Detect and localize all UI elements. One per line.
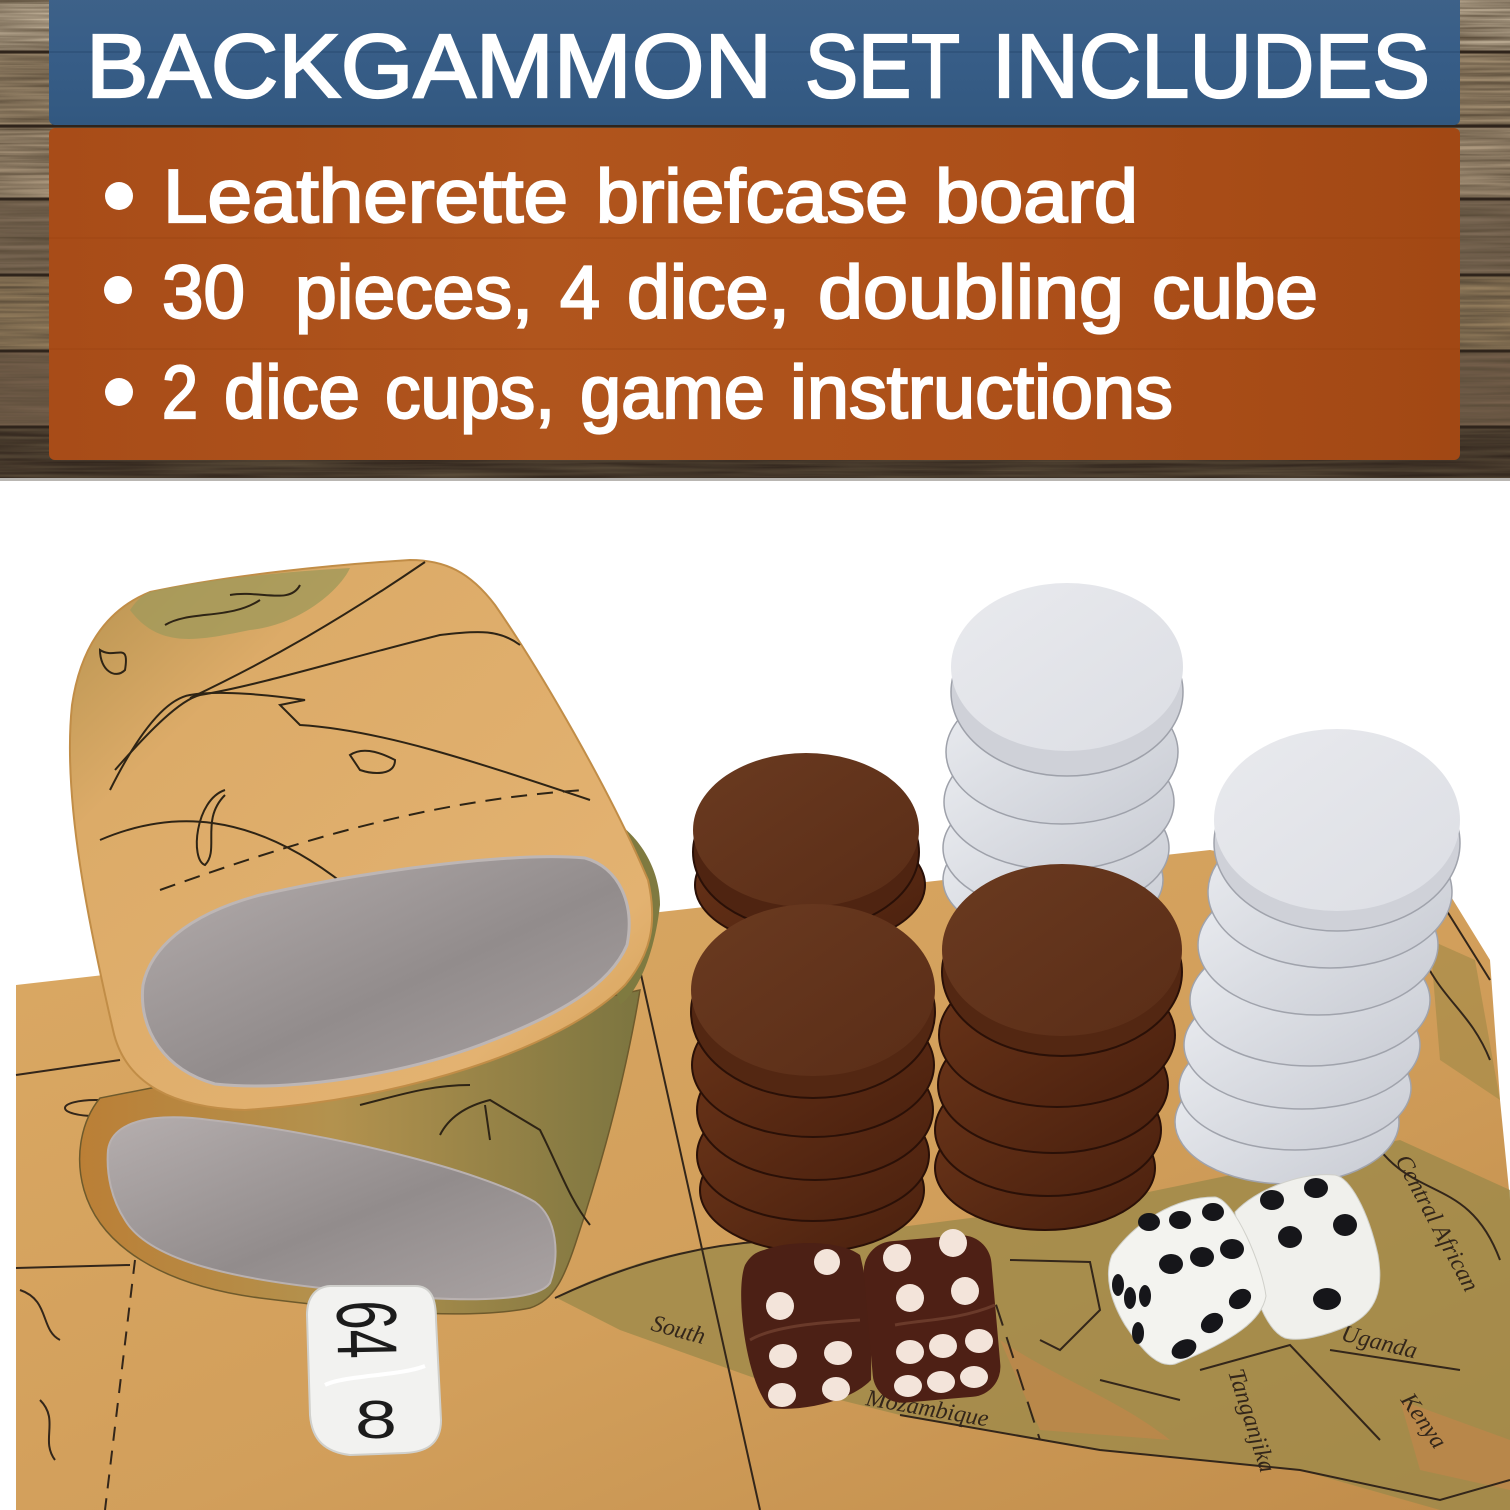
- bullet item 3: [105, 350, 1173, 434]
- bullet item 1: [105, 154, 1138, 238]
- icon: brown dice pair: [741, 1229, 1003, 1409]
- white checker stack right: [1175, 729, 1460, 1184]
- cup interior felt: [142, 857, 629, 1086]
- bullet item 2: 4: [560, 250, 600, 334]
- bullet item 3: 2: [162, 350, 198, 434]
- map labels: South: [648, 1311, 708, 1350]
- map labels: Tanganjika: [1222, 1366, 1280, 1476]
- bullet item 1: board: [935, 154, 1138, 238]
- map labels: Mozambique: [863, 1385, 991, 1432]
- bullet item 3: game: [580, 350, 765, 434]
- bullet item 3: cups,: [385, 350, 555, 434]
- map labels: Kenya: [1395, 1388, 1452, 1454]
- product photo: map board: [16, 850, 1510, 1510]
- brown die right: [861, 1229, 1003, 1405]
- white die left: [1108, 1197, 1266, 1365]
- bullet item 2: cube: [1152, 250, 1318, 334]
- icon: upper dice cup: [70, 560, 660, 1110]
- cup interior felt: [108, 1117, 555, 1299]
- icon: lower dice cup: [80, 990, 640, 1314]
- brown checker stack center: [691, 904, 935, 1252]
- bullet item 2: dice,: [627, 250, 790, 334]
- brown checker stack back: [693, 753, 925, 947]
- icon: doubling cube: 8: [355, 1390, 397, 1450]
- bullet item 2: pieces,: [295, 250, 533, 334]
- divider under wood strip: [0, 478, 1510, 481]
- heading: [86, 17, 1430, 117]
- bullet item 2: doubling: [818, 250, 1124, 334]
- heading: INCLUDES: [992, 17, 1430, 117]
- bullet item 1: Leatherette: [163, 154, 568, 238]
- white checker stack left: [943, 583, 1183, 940]
- wood background strip: [0, 0, 1510, 478]
- bullet item 2: 30: [162, 250, 245, 334]
- map labels: Central African: [1390, 1151, 1483, 1296]
- bullet item 3: instructions: [790, 350, 1173, 434]
- bullet item 2: [104, 250, 1318, 334]
- panel: contents list: [49, 128, 1460, 460]
- brown checker stack right: [935, 864, 1182, 1230]
- icon: white dice pair: [1108, 1175, 1380, 1365]
- map labels: [648, 1151, 1483, 1476]
- heading: BACKGAMMON: [86, 17, 772, 117]
- white die right: [1235, 1175, 1380, 1339]
- bullet item 1: briefcase: [596, 154, 908, 238]
- icon: doubling cube: [307, 1286, 441, 1455]
- heading: SET: [805, 17, 960, 117]
- panel: title banner: [49, 0, 1460, 125]
- bullet item 3: dice: [224, 350, 360, 434]
- map labels: Uganda: [1339, 1321, 1420, 1365]
- icon: doubling cube: 64: [318, 1300, 414, 1359]
- brown die left: [741, 1243, 871, 1409]
- map patch on cup: [130, 568, 350, 639]
